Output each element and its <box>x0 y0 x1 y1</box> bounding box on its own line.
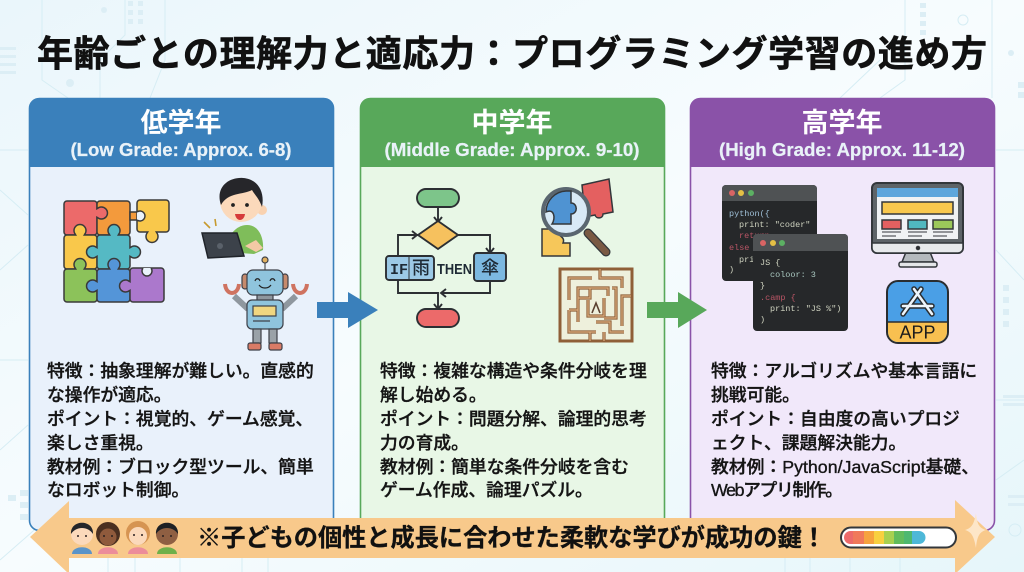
panel header: low grade: 低学年 <box>140 108 222 138</box>
text: high grade description: Webアプリ制作。 <box>711 480 843 500</box>
title: 年齢ごとの理解力と適応力：プログラミング学習の進め方 <box>37 33 987 74</box>
icon: four children <box>71 521 178 554</box>
text: low grade description: 教材例：ブロック型ツール、簡単 <box>47 456 314 477</box>
text: high grade description: ェクト、課題解決能力。 <box>711 433 906 453</box>
icon: code windows: return <box>739 231 770 241</box>
text: low grade description <box>47 360 314 500</box>
text: high grade description: ポイント：自由度の高いプロジ <box>711 409 960 429</box>
icon: app badge <box>887 281 948 343</box>
text: middle grade description: ポイント：問題分解、論理的思考 <box>380 409 647 429</box>
text: middle grade description <box>380 361 647 500</box>
text: low grade description: ポイント：視覚的、ゲーム感覚、 <box>47 409 313 429</box>
icon: code windows: else <box>729 243 749 253</box>
icon: flowchart: 雨 <box>412 258 430 278</box>
icon: code windows <box>722 185 848 331</box>
panel header: low grade <box>29 98 334 167</box>
text: high grade description <box>711 360 979 500</box>
icon: code windows: print: "JS %") <box>770 304 841 314</box>
banner: bottom double arrow <box>30 500 995 572</box>
icon: flowchart: IF <box>390 262 408 279</box>
icon: code windows: ) <box>760 315 765 325</box>
icon: code windows: coloor: 3 <box>770 270 816 280</box>
panel: low grade <box>29 98 334 530</box>
icon: flowchart <box>386 189 506 327</box>
icon: app badge: APP <box>899 322 936 342</box>
icon: magnifier with puzzle <box>542 179 613 256</box>
panel header: high grade <box>690 98 995 167</box>
icon: code windows: JS { <box>760 258 780 268</box>
icon: flowchart: 傘 <box>481 258 499 278</box>
text: low grade description: 特徴：抽象理解が難しい。直感的 <box>47 360 314 381</box>
panel header: low grade: (Low Grade: Approx. 6-8) <box>70 139 292 160</box>
icon: code windows: ) <box>729 265 734 275</box>
arrow: low to middle <box>317 292 378 328</box>
text: middle grade description: 特徴：複雑な構造や条件分岐を理 <box>380 361 647 381</box>
panel header: middle grade: (Middle Grade: Approx. 9-10) <box>384 139 640 160</box>
icon: code windows: } <box>760 281 765 291</box>
icon: robot <box>225 257 307 350</box>
text: high grade description: 挑戦可能。 <box>711 385 800 405</box>
text: middle grade description: 教材例：簡単な条件分岐を含む <box>380 457 629 477</box>
icon: boy with tablet <box>202 178 267 258</box>
icon: code windows: python({ <box>729 209 770 219</box>
icon: progress bar <box>841 528 956 548</box>
panel: high grade <box>690 98 995 530</box>
text: low grade description: な操作が適応。 <box>47 384 171 405</box>
icon: code windows: print: "coder" <box>739 220 810 230</box>
text: high grade description: 特徴：アルゴリズムや基本言語に <box>711 360 977 381</box>
text: low grade description: なロボット制御。 <box>47 480 189 500</box>
panel header: middle grade <box>360 98 665 167</box>
icon: puzzle <box>64 200 169 302</box>
panel header: high grade: (High Grade: Approx. 11-12) <box>719 139 965 160</box>
text: middle grade description: 力の育成。 <box>380 433 469 453</box>
icon: code windows: pri <box>739 255 754 265</box>
text: middle grade description: ゲーム作成、論理パズル。 <box>380 479 593 500</box>
text: high grade description: 教材例：Python/JavaScript基礎、 <box>711 457 979 477</box>
icon: web browser monitor <box>872 183 963 267</box>
text: low grade description: 楽しさ重視。 <box>47 433 154 453</box>
text: middle grade description: 解し始める。 <box>380 385 487 405</box>
panel header: high grade: 高学年 <box>802 108 882 138</box>
icon: maze <box>560 269 632 341</box>
icon: flowchart: THEN <box>437 261 472 278</box>
icon: code windows: .camp { <box>760 293 796 303</box>
panel header: middle grade: 中学年 <box>472 108 552 138</box>
callout text: ※子どもの個性と成長に合わせた柔軟な学びが成功の鍵！ <box>197 524 826 552</box>
arrow: middle to high <box>647 292 707 328</box>
panel: middle grade <box>360 98 665 530</box>
